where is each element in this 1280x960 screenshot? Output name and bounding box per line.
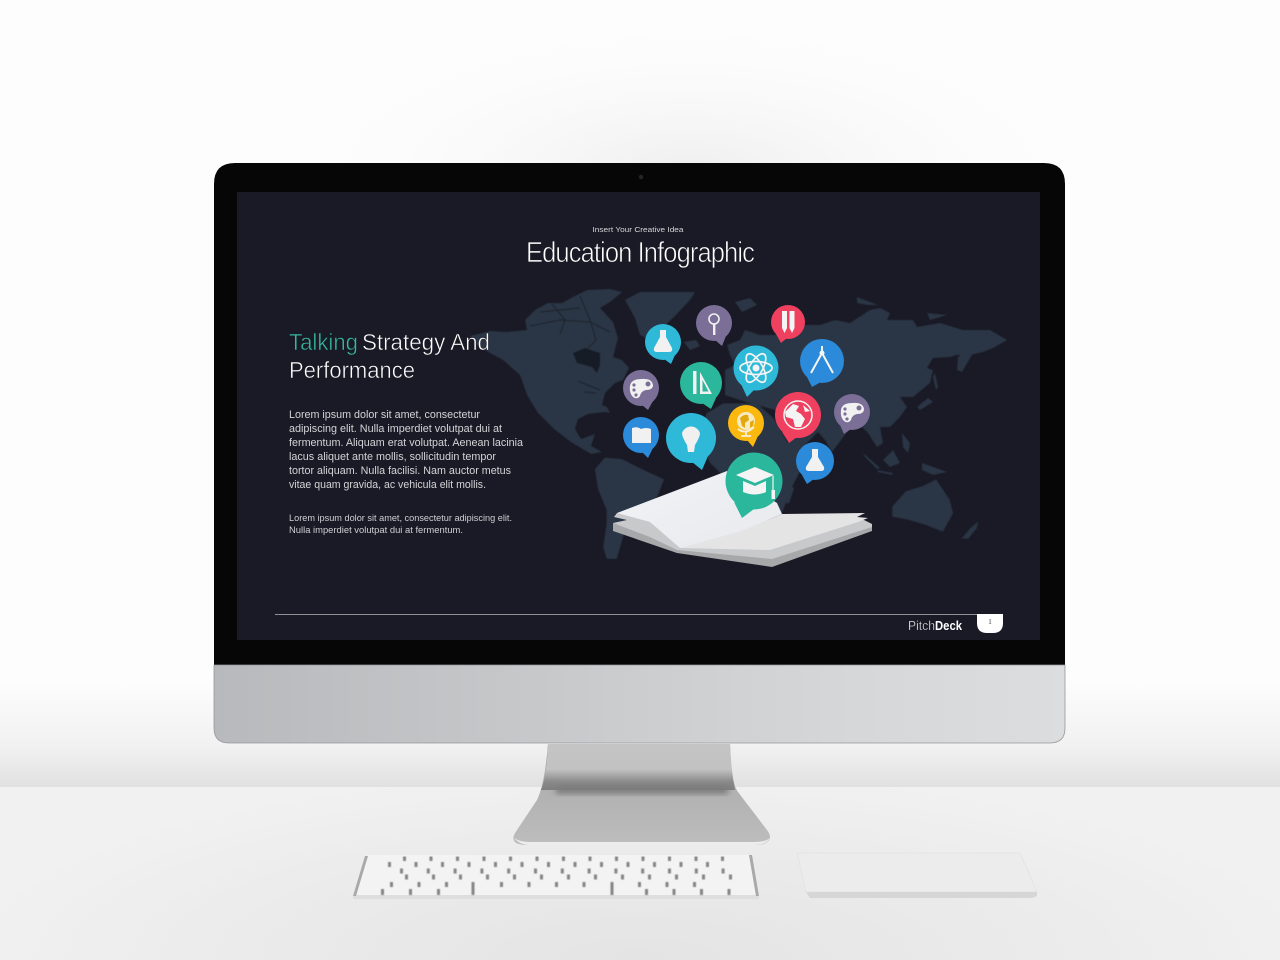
footer logo: PitchDeck xyxy=(908,618,963,633)
arctic islands north of asia xyxy=(857,297,878,305)
subtitle: Insert Your Creative Idea xyxy=(592,225,684,234)
svalbard xyxy=(735,298,757,312)
australia xyxy=(892,479,953,532)
icon: ruler and set square on teal bubble xyxy=(680,362,722,409)
keyboard side edges xyxy=(353,856,368,896)
monitor chin xyxy=(214,665,1065,743)
southern continents xyxy=(595,403,978,559)
icon: pencils on red bubble xyxy=(771,305,805,343)
title: Education Infographic xyxy=(526,237,755,269)
icon: compass on blue bubble xyxy=(800,339,844,387)
heading words: Strategy And: Strategy And xyxy=(362,329,490,355)
icon: earth on red bubble xyxy=(775,392,821,443)
icon: flask on cyan bubble xyxy=(645,324,681,364)
body paragraph xyxy=(289,409,523,491)
monitor xyxy=(214,163,1065,743)
page number: 1 xyxy=(988,618,992,626)
heading word: Talking: Talking xyxy=(289,329,358,355)
body paragraph: lacus aliquet ante mollis, sollicitudin tempor xyxy=(289,451,496,463)
secondary paragraph: Nulla imperdiet volutpat dui at fermentum. xyxy=(289,525,463,535)
southeast asia islands xyxy=(883,450,900,467)
body paragraph: fermentum. Aliquam erat volutpat. Aenean lacinia xyxy=(289,437,523,449)
section heading xyxy=(289,329,490,383)
icon: palette on purple bubble (right) xyxy=(834,394,870,434)
slide screen xyxy=(237,192,1040,640)
trackpad xyxy=(797,853,1037,898)
footer rule xyxy=(275,614,977,615)
icon: flask on blue bubble xyxy=(796,442,834,484)
icon: atom on cyan bubble xyxy=(734,346,778,397)
keyboard body xyxy=(353,855,758,895)
new zealand xyxy=(962,522,978,539)
madagascar xyxy=(783,486,794,503)
south america xyxy=(595,457,664,559)
book middle layer xyxy=(613,513,872,559)
icon: palette on purple bubble (left) xyxy=(623,370,659,410)
arctic channels and great lakes xyxy=(530,296,610,393)
logo word: Pitch: Pitch xyxy=(908,618,935,633)
book bottom layer xyxy=(613,523,872,567)
page number tab xyxy=(977,614,1003,633)
left page xyxy=(617,471,782,548)
hudson bay xyxy=(573,348,600,373)
icon: graduation cap on teal bubble xyxy=(726,452,782,518)
icon: open book on blue bubble xyxy=(623,417,659,458)
africa xyxy=(700,403,814,517)
body paragraph: Lorem ipsum dolor sit amet, consectetur xyxy=(289,409,480,421)
body paragraph: tortor aliquam. Nulla facilisi. Nam auctor metus xyxy=(289,465,511,477)
greenland xyxy=(625,292,695,340)
icon: light bulb on cyan bubble xyxy=(666,413,716,470)
icon: magnifier on purple bubble xyxy=(696,305,732,346)
keyboard xyxy=(353,855,759,899)
iceland xyxy=(684,340,700,350)
sakhalin xyxy=(933,373,938,390)
monitor bezel xyxy=(214,163,1065,665)
secondary paragraph: Lorem ipsum dolor sit amet, consectetur adipiscing elit. xyxy=(289,513,512,523)
keyboard key gaps xyxy=(381,858,735,895)
monitor stand xyxy=(513,744,770,845)
eurasia xyxy=(725,308,1007,452)
icon: desk globe on yellow bubble xyxy=(728,405,764,447)
logo word: Deck: Deck xyxy=(935,618,963,633)
open book xyxy=(613,471,872,567)
right page xyxy=(680,513,868,550)
kamchatka xyxy=(957,350,973,372)
webcam xyxy=(639,175,643,179)
heading word: Performance: Performance xyxy=(289,357,415,383)
japan xyxy=(917,398,933,410)
desk surface xyxy=(0,787,1280,960)
world map xyxy=(470,289,1007,559)
secondary paragraph xyxy=(289,513,512,535)
body paragraph: vitae quam gravida, ac vehicula elit mollis. xyxy=(289,479,486,491)
north america xyxy=(470,289,629,454)
body paragraph: adipiscing elit. Nulla imperdiet volutpat dui at xyxy=(289,423,502,435)
